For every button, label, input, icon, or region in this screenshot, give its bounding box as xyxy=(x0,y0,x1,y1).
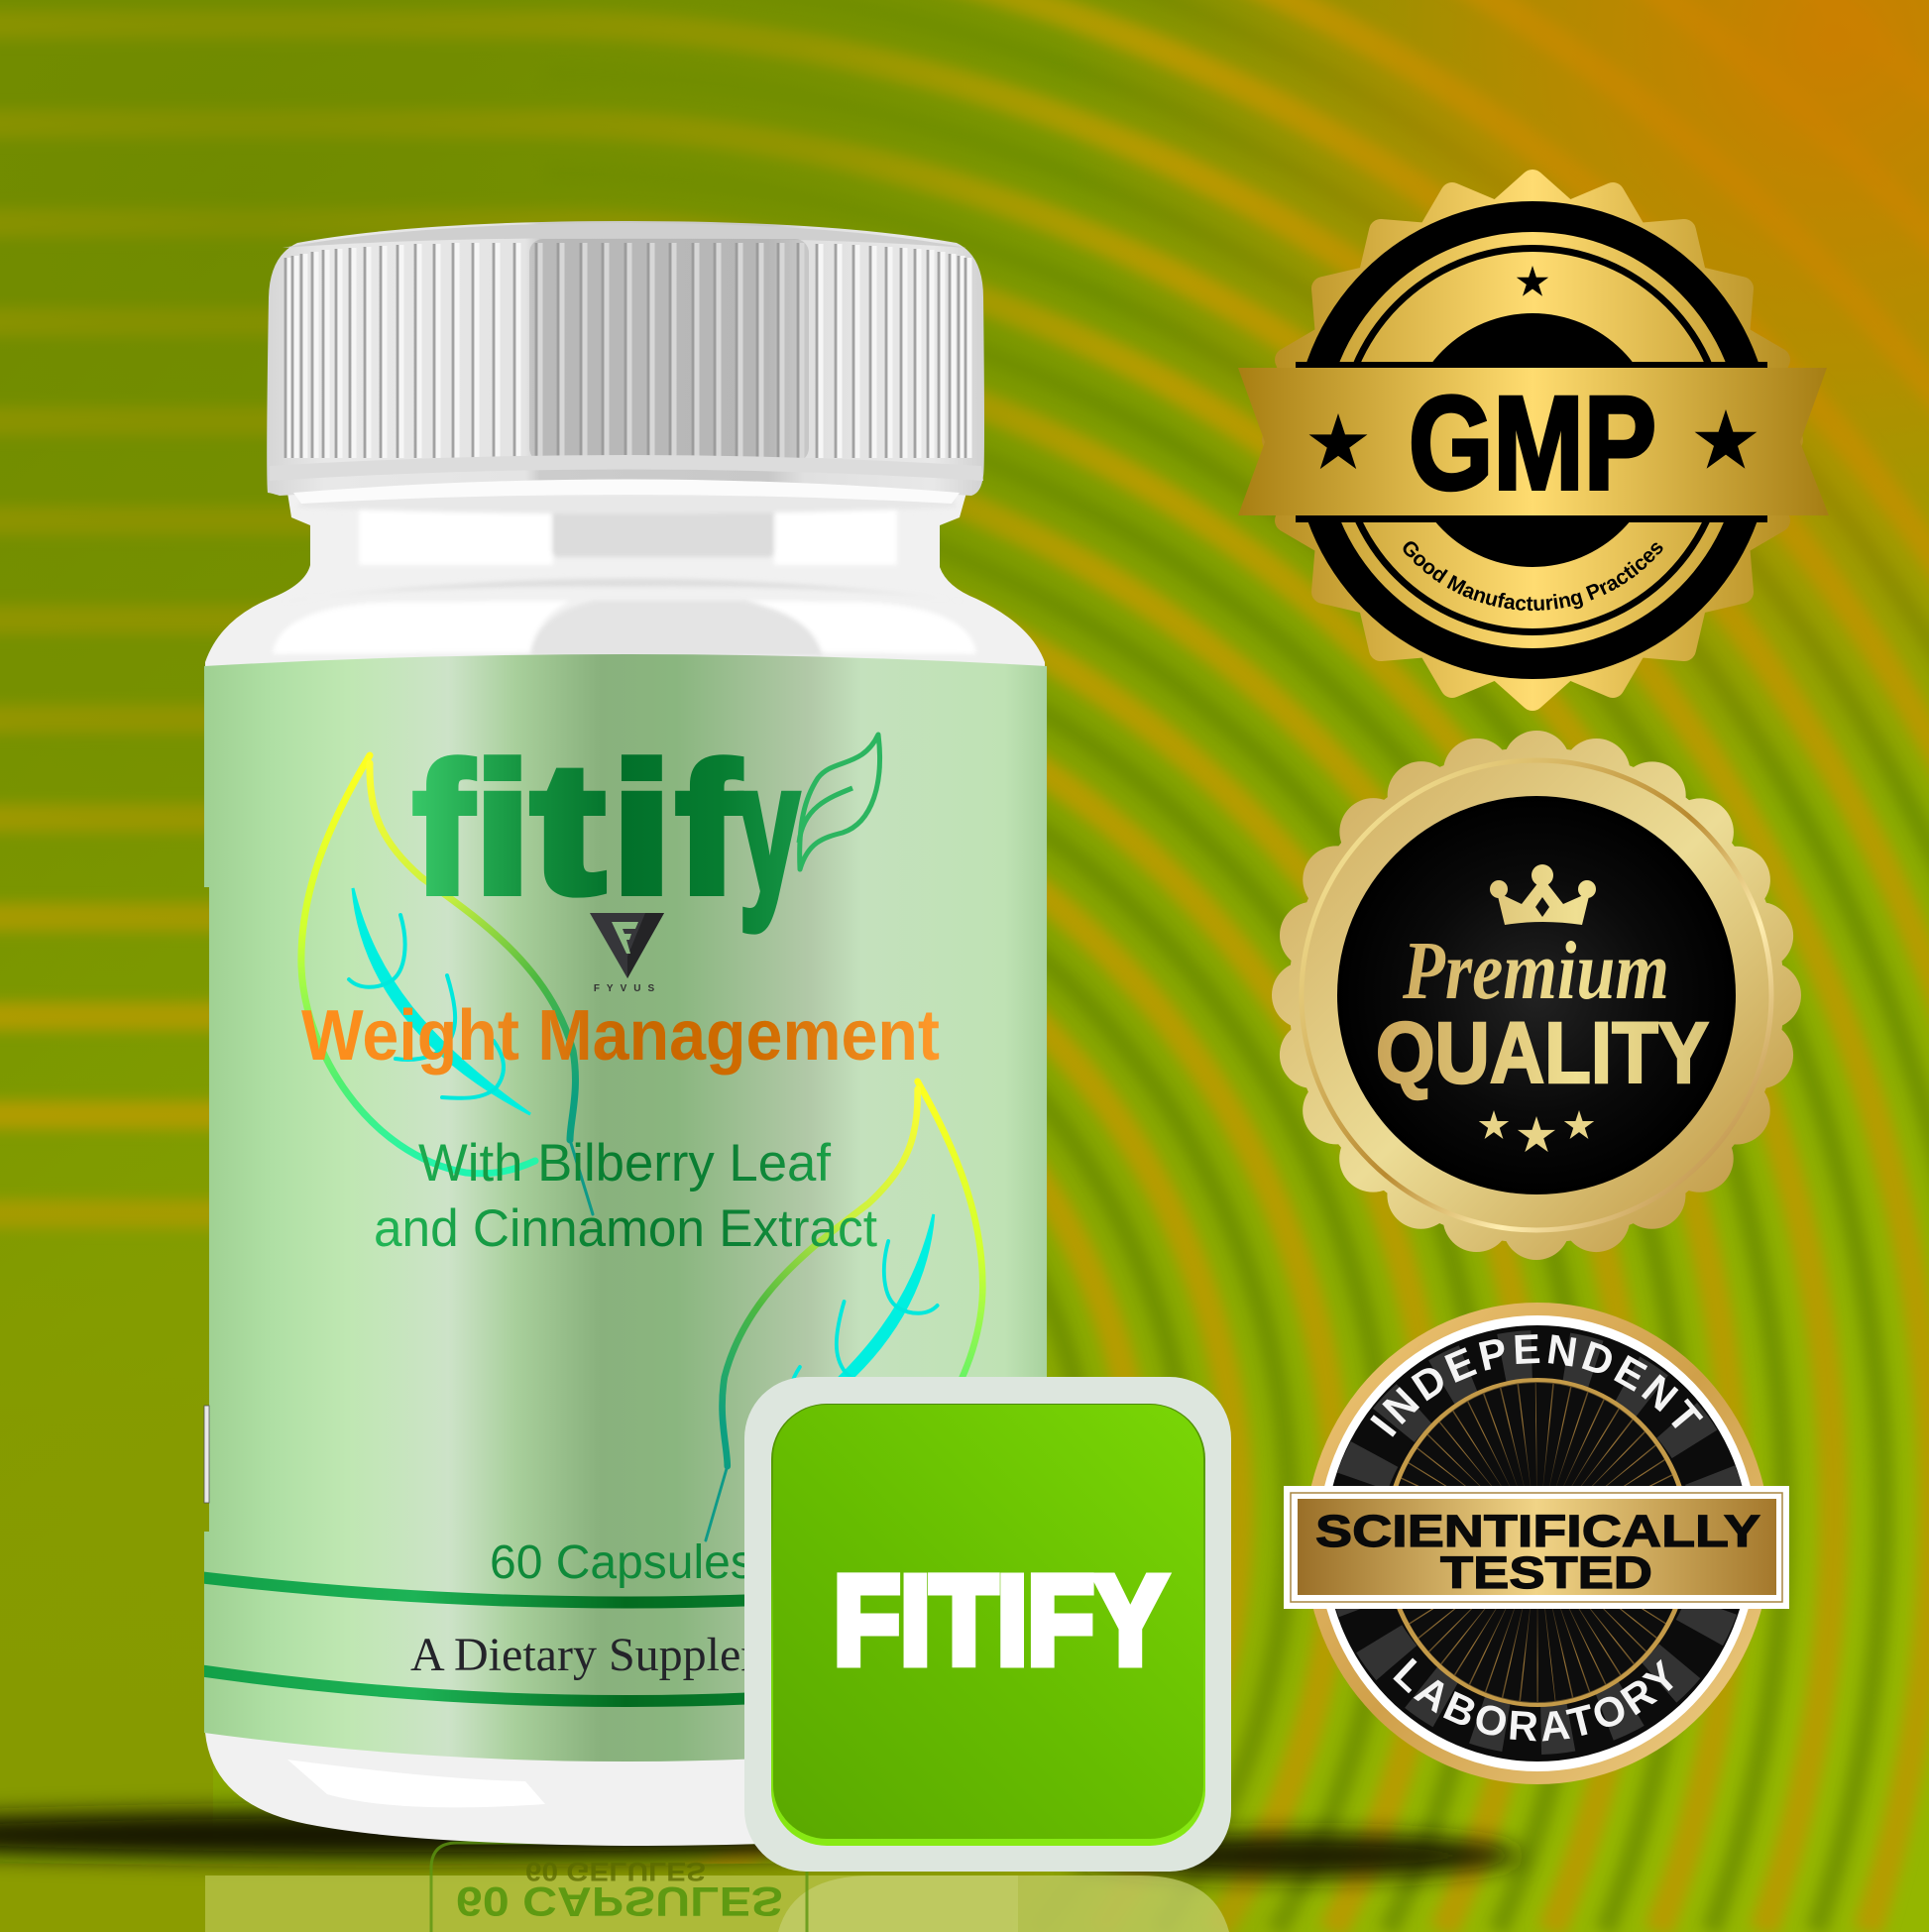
GMP tagline: Good Manufacturing Practices xyxy=(1404,541,1663,611)
GMP ribbon: GMP xyxy=(1409,370,1656,517)
neck reflections xyxy=(273,494,976,656)
product heading: Weight Management xyxy=(301,996,940,1076)
product bottle xyxy=(198,221,1053,1846)
icon: Fyvus logo xyxy=(590,913,664,994)
brand name fitify: i xyxy=(611,727,673,932)
brand name fitify: f xyxy=(413,727,474,932)
brand name fitify: t xyxy=(531,727,605,932)
LABORATORY arc text: LABORATORY xyxy=(1393,1657,1673,1741)
scientifically tested banner: TESTED xyxy=(1440,1547,1652,1598)
icon: Fyvus logo: FYVUS xyxy=(594,983,661,994)
bottle label xyxy=(198,654,1053,1807)
Premium script: Premium xyxy=(1402,925,1669,1017)
ingredient text: With Bilberry Leaf xyxy=(418,1134,831,1193)
brand name fitify: f xyxy=(676,727,740,932)
scientifically tested banner: SCIENTIFICALLY xyxy=(1315,1506,1760,1556)
capsule count: 60 Capsules xyxy=(490,1536,754,1589)
GMP scalloped seal xyxy=(1274,181,1791,699)
cap ribs xyxy=(285,243,969,458)
bottle body xyxy=(205,493,1045,1846)
Premium Quality badge xyxy=(1289,747,1784,1243)
GMP badge xyxy=(1238,170,1829,711)
reflection under the bottle: 60 GELULES xyxy=(525,1857,706,1886)
brand name fitify: y xyxy=(739,727,799,932)
ingredient text xyxy=(374,1134,877,1258)
scientifically tested banner xyxy=(1284,1486,1789,1609)
reflection under the bottle xyxy=(205,1843,1229,1932)
right leaf outline xyxy=(706,1081,982,1540)
icon: small leaf by logo xyxy=(799,735,880,869)
INDEPENDENT arc text: INDEPENDENT xyxy=(1370,1334,1703,1437)
brand name fitify xyxy=(413,727,799,932)
Scientifically Tested badge xyxy=(1284,1303,1789,1784)
bottom highlight xyxy=(287,1760,545,1807)
brand name fitify: i xyxy=(474,727,531,932)
supplement line: A Dietary Supplement xyxy=(410,1629,837,1681)
bottom lines xyxy=(204,1572,744,1707)
icon: top star xyxy=(1517,266,1548,296)
icon: crown xyxy=(1490,864,1596,925)
FITIFY square badge: FITIFY xyxy=(834,1550,1167,1690)
GMP ribbon xyxy=(1238,362,1829,522)
laboratory seal xyxy=(1305,1303,1770,1784)
ingredient text: and Cinnamon Extract xyxy=(374,1199,877,1258)
QUALITY text: QUALITY xyxy=(1376,1005,1709,1101)
icon: three stars xyxy=(1479,1110,1594,1152)
floor shadow xyxy=(0,1810,1522,1877)
cap xyxy=(267,221,984,504)
reflection under the bottle: 60 CAPSULES xyxy=(456,1878,783,1925)
FITIFY square badge xyxy=(744,1377,1231,1872)
left leaf outline xyxy=(301,755,593,1214)
